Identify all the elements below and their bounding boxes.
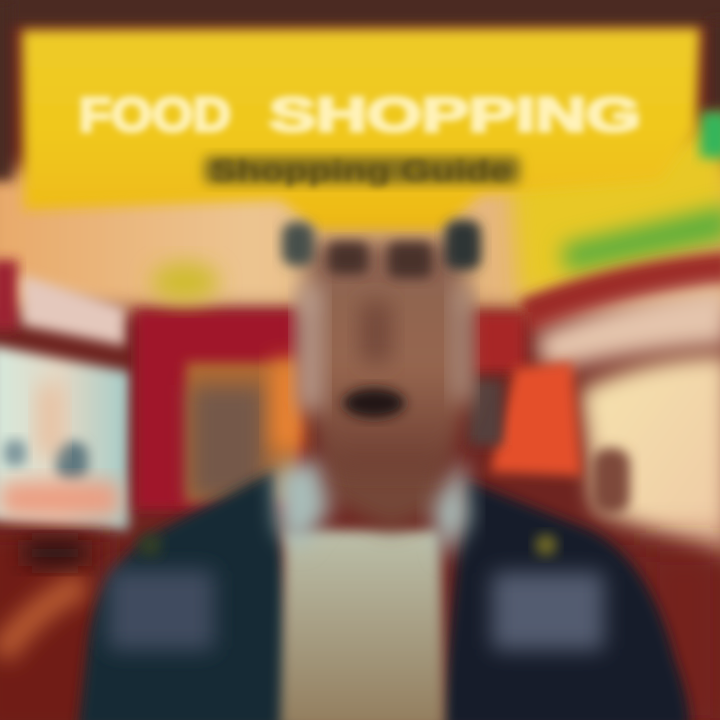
mouth	[343, 388, 405, 418]
jacket	[78, 470, 300, 720]
panel: centre red booth	[135, 262, 304, 510]
nose	[360, 300, 392, 364]
hair right	[445, 220, 481, 270]
panel: left store	[0, 260, 130, 720]
subtitle	[204, 155, 520, 186]
hair left	[282, 222, 314, 266]
figure: man in suit	[78, 220, 690, 720]
glasses	[328, 242, 432, 278]
badge right	[492, 572, 604, 650]
title	[79, 89, 641, 142]
collar	[275, 458, 330, 550]
neck	[320, 420, 450, 530]
subtitle: Shopping Guide	[211, 155, 511, 186]
lapel pin right	[535, 534, 557, 556]
lapel pin left	[138, 533, 162, 557]
title: FOOD	[79, 89, 231, 142]
title: SHOPPING	[269, 89, 641, 142]
side of face highlight	[298, 285, 322, 410]
shirt	[280, 530, 445, 720]
badge left	[108, 570, 214, 650]
panel: yellow banner	[22, 28, 700, 232]
face	[305, 240, 470, 470]
panel: right store	[468, 112, 720, 720]
